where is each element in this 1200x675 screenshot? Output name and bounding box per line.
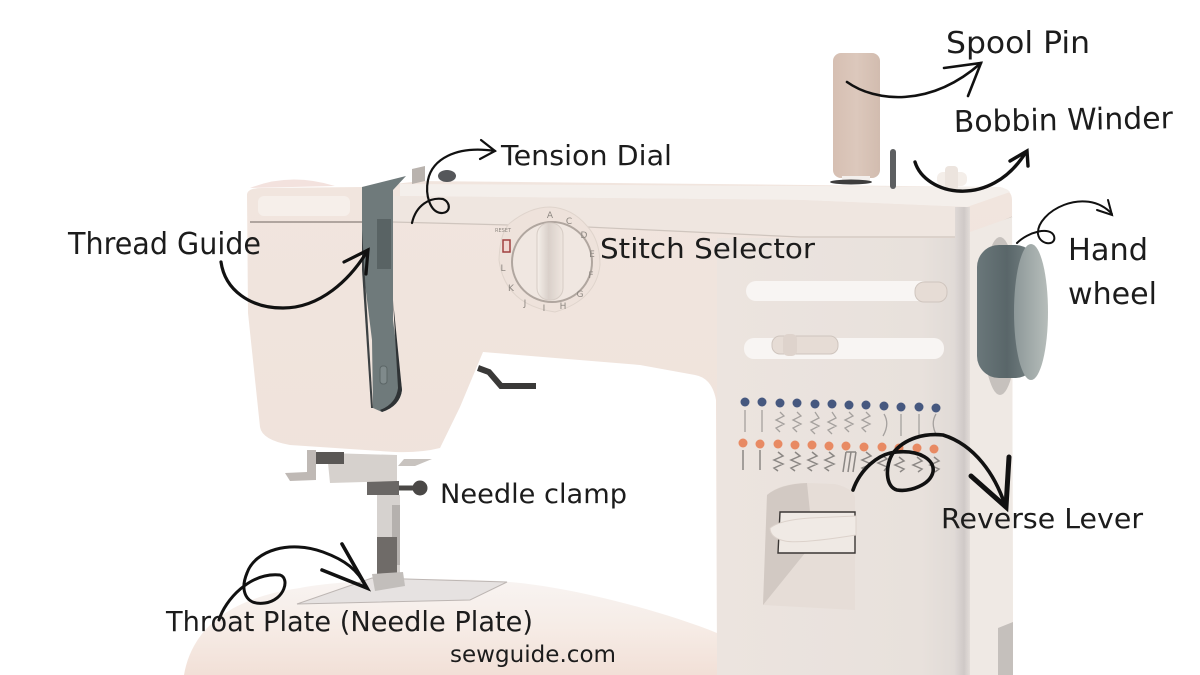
bobbin winder	[893, 152, 967, 191]
thread guide cover	[362, 176, 406, 412]
stitch selector dial: A	[547, 211, 554, 221]
sewing machine illustration	[184, 53, 1048, 675]
presser foot and needle bar	[285, 450, 432, 591]
grey band	[955, 207, 970, 675]
thread bracket	[412, 166, 425, 184]
label: tension dial: Tension Dial	[500, 139, 672, 172]
stitch selector dial: K	[508, 284, 515, 294]
label: reverse lever: Reverse Lever	[941, 502, 1143, 535]
label: bobbin winder: Bobbin Winder	[954, 101, 1174, 140]
stitch selector dial: L	[500, 264, 506, 274]
stitch selector dial: F	[588, 271, 594, 281]
top surface highlight	[400, 184, 1010, 207]
head highlight	[258, 196, 350, 216]
stitch selector dial: RESET	[495, 228, 512, 234]
side switch	[998, 622, 1013, 675]
take-up lever	[478, 368, 536, 386]
stitch selector dial	[495, 207, 600, 314]
sliders	[744, 281, 947, 359]
stitch selector dial: J	[523, 299, 526, 309]
arrow: bobbin winder	[915, 151, 1028, 191]
stitch selector dial: G	[577, 290, 584, 300]
front band	[393, 196, 967, 237]
label: hand wheel: wheel	[1068, 277, 1157, 312]
label: thread guide: Thread Guide	[67, 227, 261, 262]
arrow: spool pin	[847, 63, 981, 97]
arrow: thread guide	[221, 250, 368, 308]
label: throat plate: Throat Plate (Needle Plate)	[165, 605, 533, 638]
stitch selector dial: D	[581, 231, 588, 241]
label: needle clamp: Needle clamp	[440, 479, 627, 510]
right column front panel	[717, 238, 957, 675]
reverse lever	[763, 483, 856, 610]
stitch selector dial: C	[566, 217, 572, 227]
arrow: throat plate	[219, 544, 367, 620]
pink top behind head	[250, 179, 335, 188]
stitch chart	[738, 398, 940, 472]
head seam lines	[250, 221, 362, 223]
hand wheel	[977, 237, 1048, 395]
throat plate	[297, 578, 507, 604]
label: hand wheel: Hand	[1068, 233, 1148, 268]
stitch selector dial: I	[543, 304, 545, 314]
machine body with arm	[247, 181, 1013, 675]
tension knob	[438, 170, 456, 182]
label: spool pin: Spool Pin	[946, 26, 1090, 61]
arrow: hand wheel	[1017, 200, 1112, 243]
machine base	[184, 579, 735, 675]
arrow: reverse lever	[853, 435, 1009, 507]
arrow: tension dial	[412, 140, 495, 223]
stitch selector dial: H	[560, 302, 566, 312]
side panel	[970, 217, 1013, 675]
label: hand wheel	[1068, 233, 1157, 312]
thread spool	[830, 53, 880, 184]
credit: sewguide.com: sewguide.com	[450, 642, 616, 668]
label: stitch selector: Stitch Selector	[600, 232, 816, 265]
stitch selector dial: E	[589, 250, 595, 260]
